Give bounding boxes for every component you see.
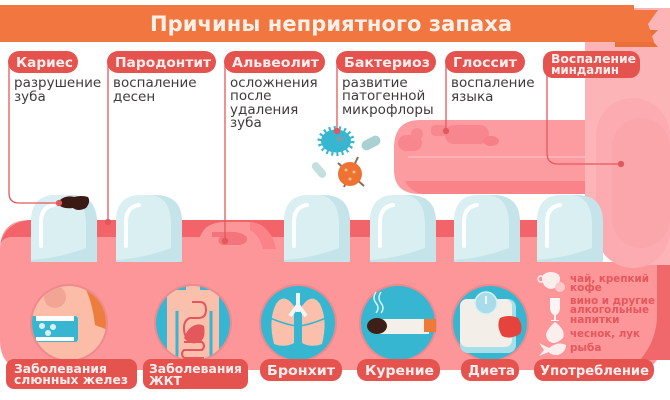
icon: digestive tract — [154, 284, 232, 359]
label: Диета — [461, 359, 519, 381]
label: Кариес — [8, 51, 78, 73]
label: Пародонтит: Пародонтит — [115, 55, 211, 71]
label: Диета: Диета — [468, 363, 515, 379]
text: бактериоз: микрофлоры — [342, 102, 434, 118]
text: альвеолит: зуба — [230, 115, 262, 131]
tongue — [394, 120, 585, 194]
text: глоссит: языка — [451, 89, 493, 105]
teeth — [31, 195, 603, 262]
text: альвеолит: осложнения — [230, 75, 318, 91]
text: глоссит: воспаление — [451, 75, 535, 91]
label: Альвеолит: Альвеолит — [232, 55, 319, 71]
connector lines — [9, 62, 624, 244]
icon: wine glass — [550, 298, 560, 321]
icon: lungs — [258, 284, 338, 364]
label: Пародонтит — [107, 51, 216, 73]
text: пародонтит: десен — [113, 89, 155, 105]
usage text: напитки — [570, 314, 620, 326]
icon: fish — [539, 343, 566, 356]
label: Заболевания слюнных желез — [6, 359, 137, 389]
caries spot — [60, 196, 89, 210]
label: Курение — [357, 359, 440, 381]
label: Воспаление миндалин — [543, 51, 640, 78]
label: Заболевания слюнных желез: слюнных желез — [14, 373, 128, 387]
label: Бактериоз: Бактериоз — [344, 55, 430, 71]
label: Употребление: Употребление — [540, 363, 649, 379]
usage text: чай, крепкий — [570, 273, 649, 285]
title: Причины неприятного запаха — [150, 12, 512, 36]
text: кариес: разрушение — [14, 75, 101, 91]
label: Кариес: Кариес — [16, 55, 73, 71]
label: Заболевания ЖКТ: Заболевания — [149, 362, 242, 376]
text: альвеолит: удаления — [230, 102, 298, 118]
icon: cigarette — [359, 284, 437, 362]
label: Альвеолит — [224, 51, 325, 73]
label: Бронхит: Бронхит — [267, 363, 335, 379]
label: Заболевания ЖКТ: ЖКТ — [149, 374, 182, 388]
label: Глоссит: Глоссит — [453, 55, 517, 71]
throat panel — [585, 8, 670, 268]
label: Курение: Курение — [365, 363, 434, 379]
label: Бронхит — [260, 359, 342, 381]
text: бактериоз: развитие — [342, 75, 408, 91]
label: Употребление — [534, 359, 654, 381]
text: кариес: зуба — [14, 89, 46, 105]
label: Воспаление миндалин: Воспаление — [551, 52, 636, 66]
icon: cup — [538, 272, 565, 292]
usage text: алкогольные — [570, 304, 649, 316]
title banner — [0, 5, 658, 47]
text: бактериоз: патогенной — [342, 88, 425, 104]
label: Бактериоз — [336, 51, 436, 73]
text: альвеолит: после — [230, 88, 271, 104]
usage text: чеснок, лук — [570, 328, 640, 340]
usage text: рыба — [570, 342, 601, 354]
usage text: кофе — [570, 282, 602, 294]
usage list — [538, 272, 655, 356]
icon: garlic — [546, 322, 564, 343]
gum — [0, 220, 670, 370]
text: пародонтит: воспаление — [113, 75, 197, 91]
label: Воспаление миндалин: миндалин — [551, 63, 619, 77]
usage text: вино и другие — [570, 295, 655, 307]
icon: salivary glands — [30, 284, 108, 362]
label: Заболевания ЖКТ — [143, 359, 248, 389]
label: Глоссит — [445, 51, 525, 73]
bacteria — [310, 128, 382, 187]
label: Заболевания слюнных желез: Заболевания — [14, 362, 107, 376]
icon: scales and apple — [451, 284, 529, 362]
